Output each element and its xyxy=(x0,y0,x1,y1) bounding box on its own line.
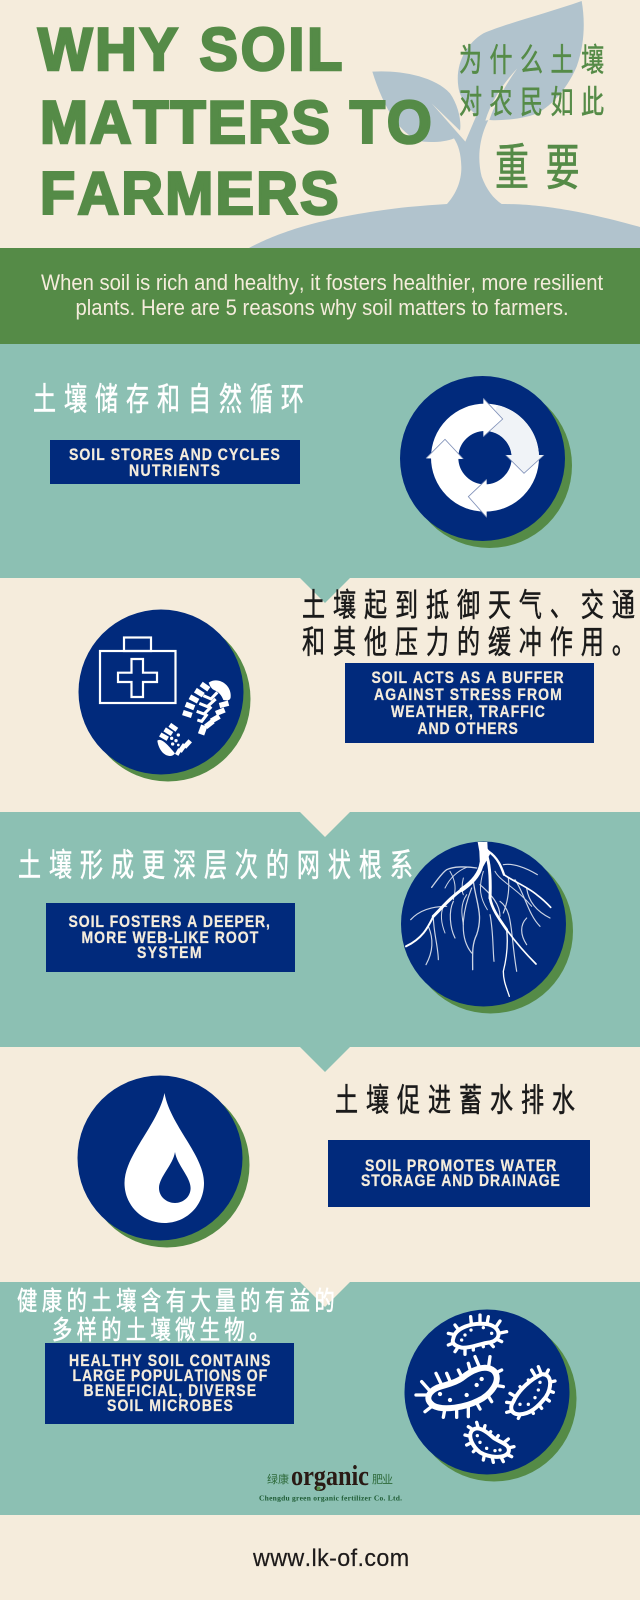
title: chinese: 对农民如此 xyxy=(459,84,611,120)
title: why soil matters to farmers: FARMERS xyxy=(40,161,339,227)
label box: reason 4 xyxy=(328,1140,590,1207)
label box: reason 3: MORE WEB-LIKE ROOT xyxy=(82,929,259,947)
heading: reason 5 chinese: 健康的土壤含有大量的有益的 xyxy=(17,1287,339,1316)
intro band: When soil is rich and healthy, it fosters healthier, more resilient xyxy=(41,271,603,295)
heading: reason 1 chinese: 土壤储存和自然循环 xyxy=(33,381,312,417)
heading: reason 2 chinese: 土壤起到抵御天气、交通 xyxy=(302,587,640,623)
heading: reason 3 chinese: 土壤形成更深层次的网状根系 xyxy=(18,847,421,883)
logo: organic fertilizer: 肥业 xyxy=(372,1473,393,1486)
label box: reason 5: BENEFICIAL, DIVERSE xyxy=(84,1382,256,1400)
label box: reason 3 xyxy=(46,903,295,972)
panel: reason 2 buffer xyxy=(0,578,640,812)
panel: header xyxy=(0,0,640,248)
icon: first aid kit and boot prints xyxy=(78,610,250,782)
title: why soil matters to farmers: MATTERS TO xyxy=(40,90,432,156)
panel: reason 4 water xyxy=(0,1047,640,1282)
heading: reason 2 chinese: 和其他压力的缓冲作用。 xyxy=(302,624,640,660)
heading: reason 5 chinese: 多样的土壤微生物。 xyxy=(52,1316,274,1345)
logo: organic fertilizer: organic xyxy=(291,1459,369,1491)
label box: reason 5: LARGE POPULATIONS OF xyxy=(72,1367,267,1385)
label box: reason 2: SOIL ACTS AS A BUFFER xyxy=(372,669,564,687)
title: chinese: 重要 xyxy=(495,141,596,197)
label box: reason 4: STORAGE AND DRAINAGE xyxy=(361,1172,560,1190)
title: chinese: 为什么土壤 xyxy=(459,42,611,78)
label box: reason 5: SOIL MICROBES xyxy=(107,1397,233,1415)
label box: reason 4: SOIL PROMOTES WATER xyxy=(365,1157,556,1175)
label box: reason 1: NUTRIENTS xyxy=(129,462,220,480)
footer: www.lk-of.com xyxy=(252,1546,409,1572)
panel: reason 1 nutrients xyxy=(0,344,640,578)
intro band xyxy=(0,248,640,344)
label box: reason 5: HEALTHY SOIL CONTAINS xyxy=(69,1352,270,1370)
label box: reason 2: WEATHER, TRAFFIC xyxy=(391,703,545,721)
label box: reason 5 xyxy=(45,1343,294,1424)
icon: nutrient cycle arrows xyxy=(400,376,572,548)
footer xyxy=(0,1515,640,1600)
label box: reason 3: SOIL FOSTERS A DEEPER, xyxy=(68,913,270,931)
logo: organic fertilizer xyxy=(259,1459,402,1502)
icon: soil microbes xyxy=(404,1310,576,1482)
title: why soil matters to farmers xyxy=(38,17,432,227)
intro band: plants. Here are 5 reasons why soil matters to farmers. xyxy=(76,296,569,320)
panel: reason 3 roots xyxy=(0,812,640,1047)
label box: reason 3: SYSTEM xyxy=(137,944,202,962)
logo: organic fertilizer: Chengdu green organic fertilizer Co. Ltd. xyxy=(259,1494,402,1502)
title: chinese xyxy=(459,42,611,197)
label box: reason 2: AND OTHERS xyxy=(418,720,518,738)
label box: reason 2 xyxy=(345,663,594,743)
title: why soil matters to farmers: WHY SOIL xyxy=(38,17,342,83)
logo: organic fertilizer: 绿康 xyxy=(267,1472,289,1486)
icon: seedling silhouette xyxy=(249,1,640,248)
heading: reason 2 chinese xyxy=(302,587,640,660)
panel: reason 5 microbes xyxy=(0,1282,640,1515)
label box: reason 1: SOIL STORES AND CYCLES xyxy=(69,446,280,464)
icon: water drop xyxy=(78,1076,250,1248)
heading: reason 4 chinese: 土壤促进蓄水排水 xyxy=(335,1082,583,1118)
label box: reason 2: AGAINST STRESS FROM xyxy=(374,686,562,704)
heading: reason 5 chinese xyxy=(17,1287,339,1345)
icon: root system xyxy=(401,842,573,1014)
label box: reason 1 xyxy=(50,440,300,484)
